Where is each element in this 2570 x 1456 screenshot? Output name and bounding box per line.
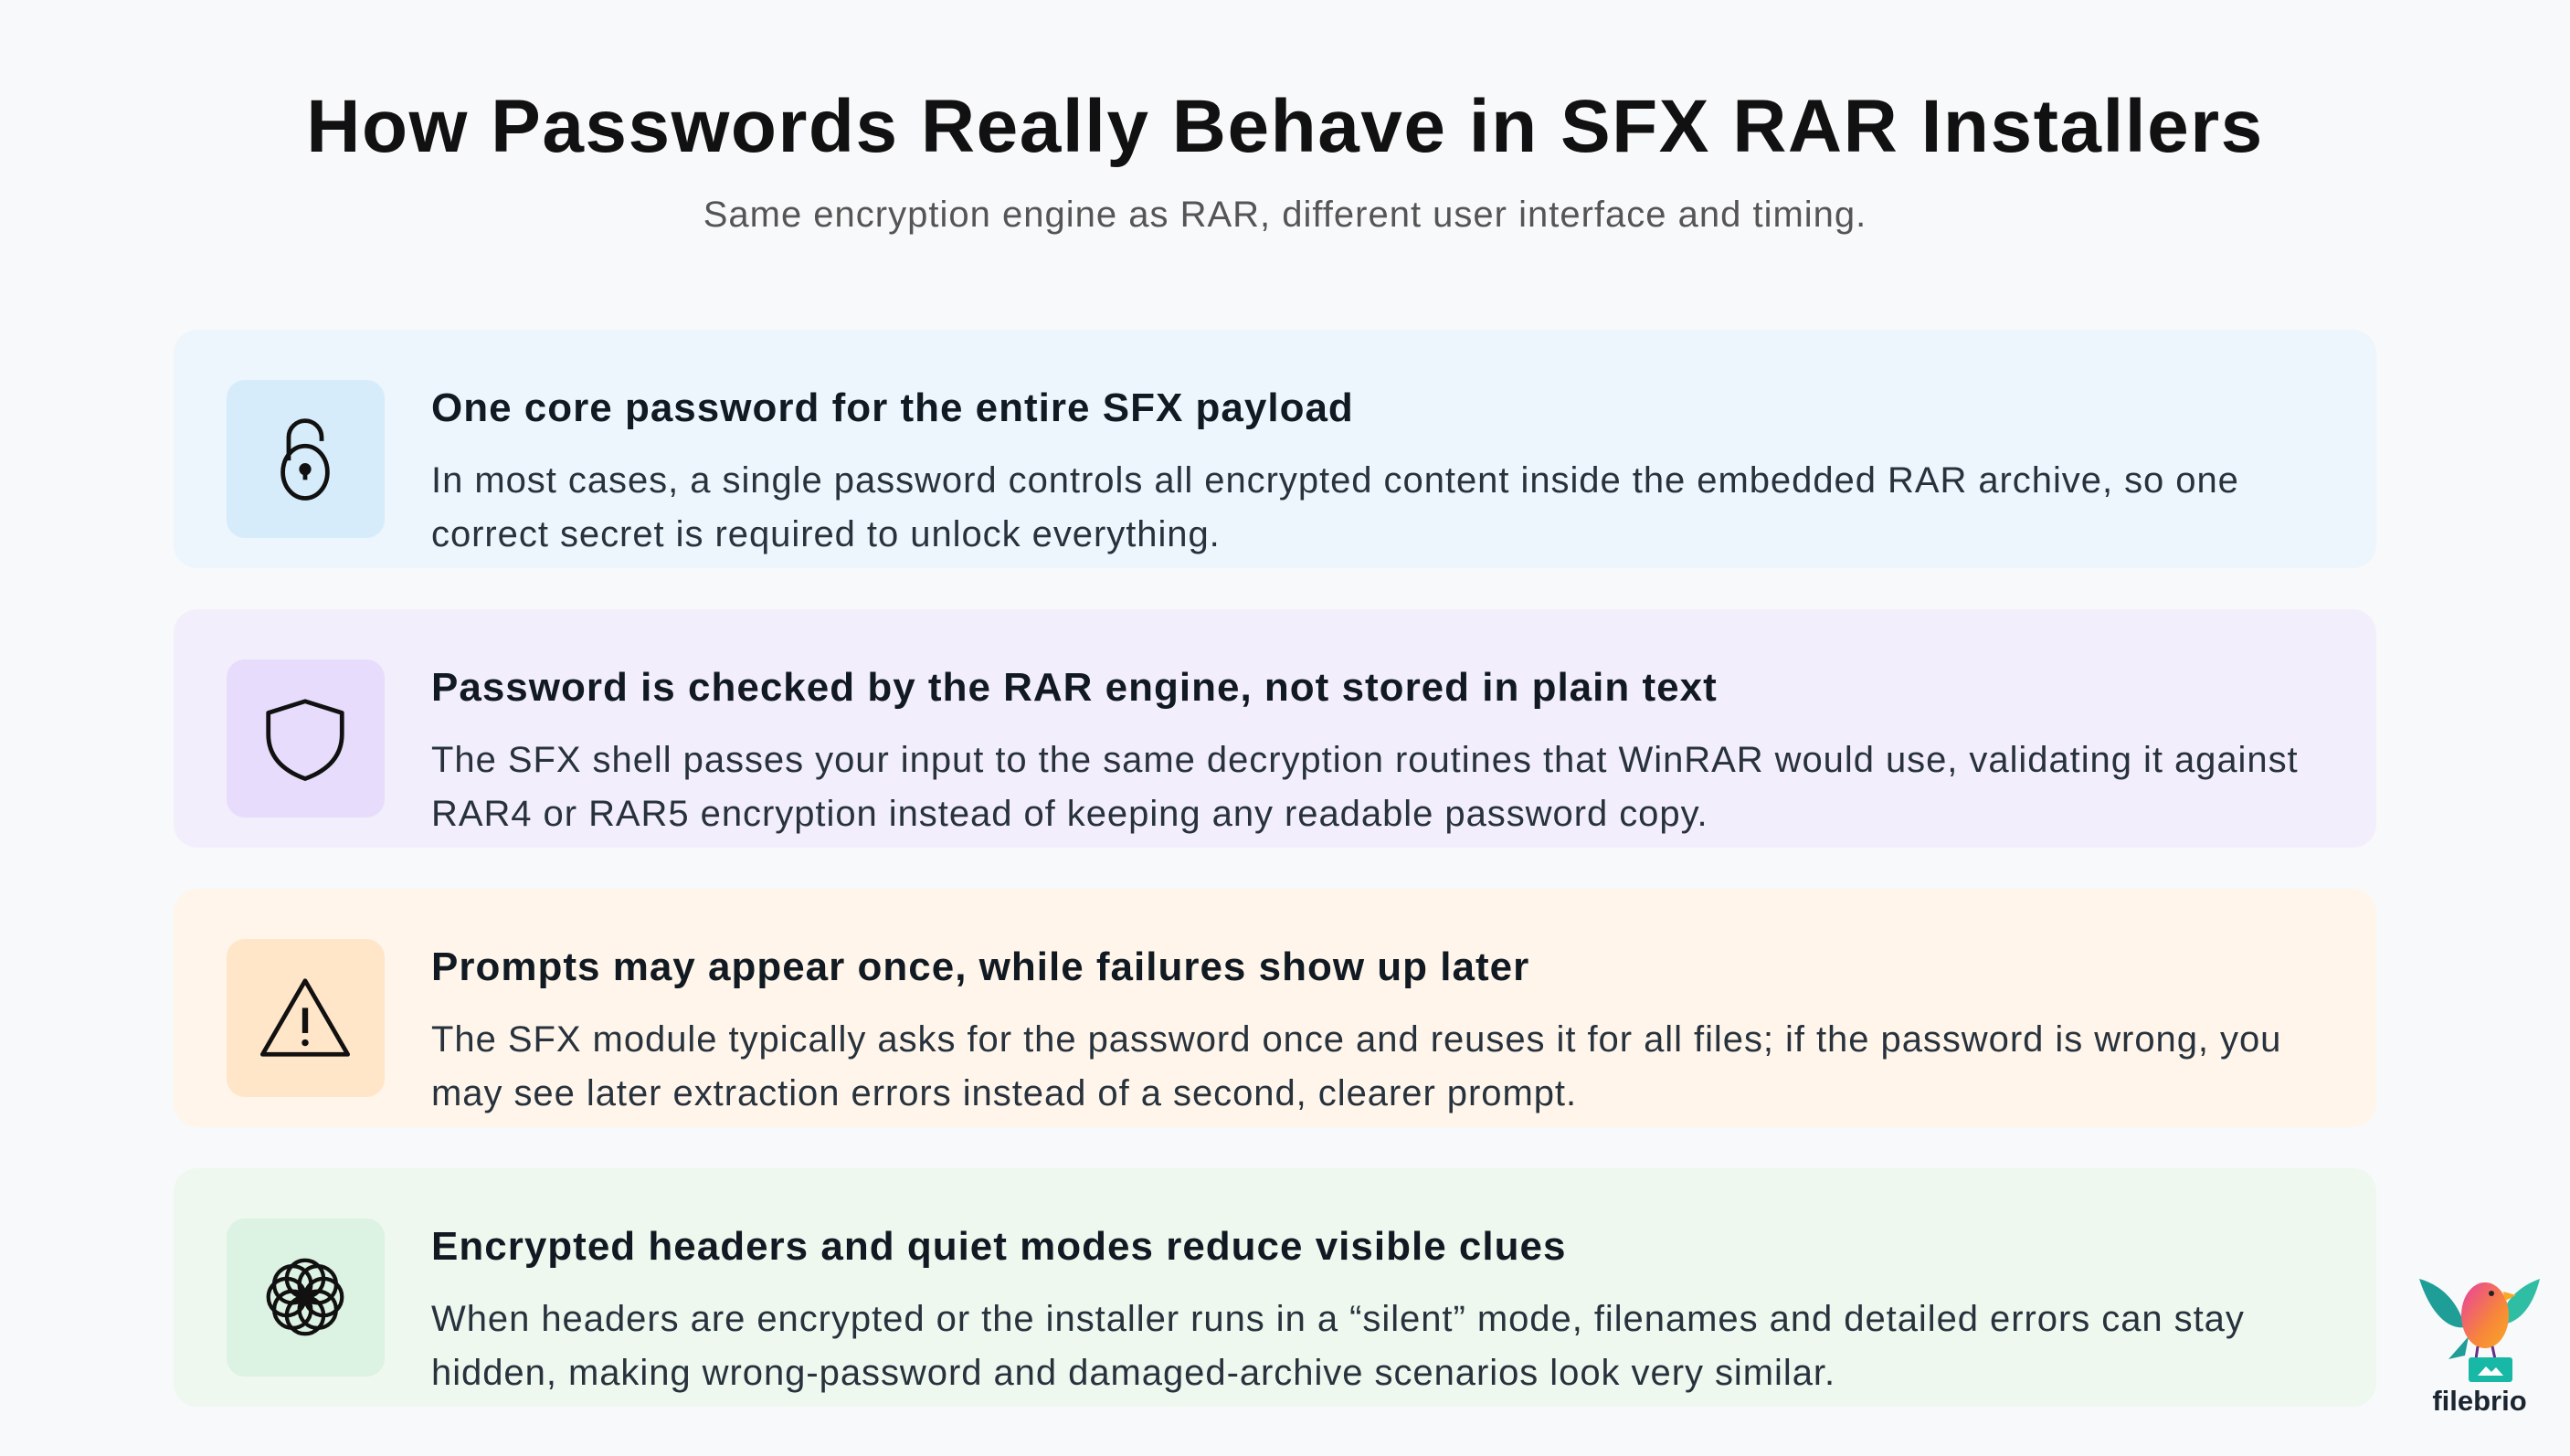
title: How Passwords Really Behave in SFX RAR Installers xyxy=(306,85,2264,168)
panel: one core password xyxy=(174,330,2376,568)
body text: The SFX shell passes your input to the same decryption routines that WinRAR would use, validating it against xyxy=(431,740,2299,780)
icon: shield xyxy=(227,659,385,818)
heading: Password is checked by the RAR engine, not stored in plain text xyxy=(431,665,1718,710)
panel: checked by RAR engine xyxy=(174,609,2376,848)
icon: warning triangle xyxy=(227,939,385,1097)
body text xyxy=(431,740,2299,834)
body text: When headers are encrypted or the installer runs in a “silent” mode, filenames and detailed errors can stay xyxy=(431,1299,2245,1339)
icon: open padlock xyxy=(227,380,385,538)
body text: may see later extraction errors instead of a second, clearer prompt. xyxy=(431,1073,1577,1113)
logo: filebrio: filebrio xyxy=(2432,1385,2527,1417)
heading: One core password for the entire SFX payload xyxy=(431,385,1354,430)
body text: RAR4 or RAR5 encryption instead of keeping any readable password copy. xyxy=(431,794,1708,834)
subtitle: Same encryption engine as RAR, different user interface and timing. xyxy=(703,195,1867,235)
body text xyxy=(431,1299,2245,1393)
panel: encrypted headers xyxy=(174,1168,2376,1407)
body text: The SFX module typically asks for the password once and reuses it for all files; if the password is wrong, you xyxy=(431,1019,2281,1060)
body text: hidden, making wrong-password and damaged-archive scenarios look very similar. xyxy=(431,1353,1835,1393)
icon: flower pattern xyxy=(227,1219,385,1377)
panel: prompts once xyxy=(174,889,2376,1127)
body text xyxy=(431,460,2239,554)
body text: In most cases, a single password controls all encrypted content inside the embedded RAR archive, so one xyxy=(431,460,2239,501)
body text xyxy=(431,1019,2281,1113)
heading: Encrypted headers and quiet modes reduce visible clues xyxy=(431,1224,1566,1269)
heading: Prompts may appear once, while failures show up later xyxy=(431,944,1529,989)
body text: correct secret is required to unlock everything. xyxy=(431,514,1221,554)
logo: filebrio xyxy=(2419,1279,2540,1417)
